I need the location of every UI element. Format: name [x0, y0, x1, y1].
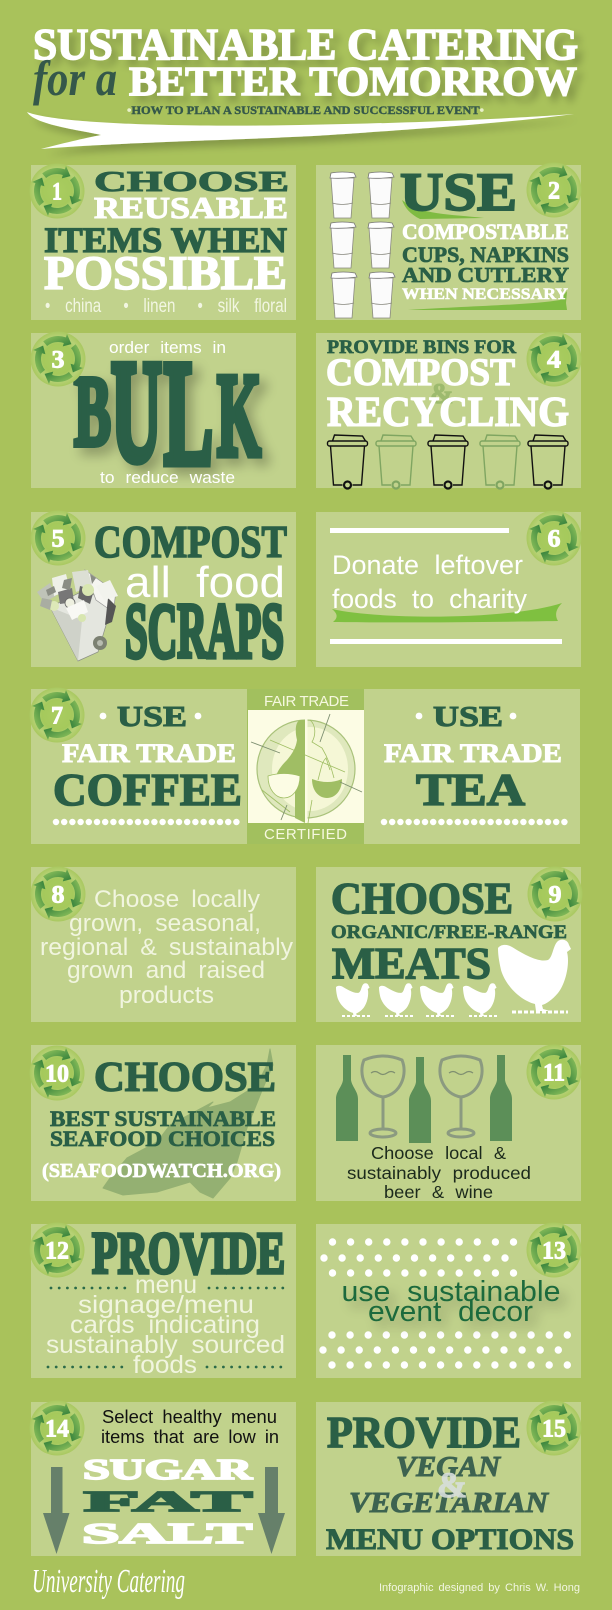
- left heading: use: USE: [117, 701, 187, 733]
- heading: use: USE: [400, 162, 517, 222]
- panel 3: bulk: [31, 331, 296, 496]
- badge 14: 14: [45, 1416, 69, 1442]
- title line 1: SUSTAINABLE CATERING: [33, 20, 578, 69]
- number badges: [30, 162, 582, 1456]
- panel 15: vegan vegetarian: [316, 1402, 581, 1556]
- title script: for a: for a: [33, 50, 117, 106]
- text block: Choose locally: [94, 886, 260, 913]
- badge 6: 6: [548, 526, 560, 552]
- footer: university catering: University Catering: [32, 1563, 185, 1600]
- heading: items when: ITEMS WHEN: [44, 220, 287, 260]
- heading: compost: COMPOST: [94, 516, 287, 567]
- text block: grown and raised: [67, 957, 265, 984]
- panel 11: beer and wine: [316, 1045, 581, 1202]
- text block: products: [119, 982, 214, 1009]
- text: use sustainable event decor: [342, 1276, 560, 1328]
- green swoosh: [408, 291, 567, 310]
- text: use sustainable event decor: event decor: [368, 1296, 533, 1328]
- bottom rule: [330, 639, 562, 644]
- left heading: coffee: COFFEE: [53, 764, 242, 815]
- text: and cutlery: AND CUTLERY: [402, 263, 569, 287]
- heading: BULK warped: [74, 331, 261, 496]
- text block: signage/menu: [78, 1291, 254, 1319]
- badge 7: [30, 688, 84, 742]
- heading: possible: POSSIBLE: [44, 247, 287, 300]
- text block: sustainably sourced: [46, 1331, 285, 1359]
- text: select healthy: items that are low in: [101, 1427, 279, 1447]
- text: cups napkins: CUPS, NAPKINS: [402, 242, 569, 267]
- right dotted rule: [384, 819, 565, 825]
- heading: menu options: MENU OPTIONS: [326, 1523, 574, 1556]
- list: • china • linen • silk floral: [45, 296, 287, 317]
- text block: Choose local &: [371, 1143, 506, 1163]
- panel 12: provide menu signage: [31, 1220, 296, 1379]
- icon: overflowing trash can: [37, 570, 118, 661]
- text block: sustainably produced: [347, 1163, 531, 1183]
- icons: bottles and glasses: [336, 1055, 512, 1143]
- left heading: fair trade: FAIR TRADE: [62, 739, 236, 768]
- heading: reusable: REUSABLE: [94, 190, 288, 225]
- panel 4: bins: [316, 333, 581, 488]
- right heading: tea: TEA: [416, 764, 525, 815]
- panel 9: meats: [316, 867, 581, 1022]
- badge 15: [526, 1400, 582, 1456]
- heading: BULK warped: L: [164, 331, 213, 496]
- icon: fish: [103, 1049, 273, 1198]
- badge 10: [30, 1046, 84, 1100]
- top rule: [330, 528, 509, 533]
- badge 9: [528, 866, 582, 922]
- panel 3: bulk: K: [217, 349, 261, 481]
- text: all food: all food: [125, 558, 285, 607]
- heading: BULK warped: U: [111, 332, 162, 492]
- text: use sustainable event decor: use sustainable: [342, 1276, 560, 1308]
- panel 14: healthy menu: [31, 1402, 296, 1556]
- title block: [27, 20, 578, 149]
- panel 6: donate: [316, 512, 581, 667]
- green swoosh: [402, 200, 484, 219]
- text block: grown, seasonal,: [69, 910, 261, 937]
- panel 1: choose reusable: [31, 165, 296, 320]
- text block: beer & wine: [384, 1182, 493, 1202]
- panel 2: compostable: [316, 162, 581, 320]
- footer: designer credit: Infographic designed by Chris W. Hong: [379, 1582, 580, 1594]
- badge 1: [30, 164, 84, 218]
- text block: [40, 886, 293, 1009]
- badge 14: [30, 1400, 84, 1456]
- badge 12: 12: [45, 1238, 69, 1264]
- heading: salt: SALT: [82, 1518, 252, 1550]
- heading: BULK warped: B: [74, 355, 111, 467]
- fair trade certified logo: [247, 689, 364, 844]
- arrow: right down: [258, 1467, 285, 1554]
- heading: provide: PROVIDE: [327, 1408, 521, 1457]
- badge 1: 1: [52, 178, 62, 206]
- text: seafood choices: SEAFOOD CHOICES: [50, 1126, 275, 1151]
- ampersand: &: [437, 1465, 467, 1505]
- badge 4: 4: [547, 346, 562, 374]
- badge 8: 8: [52, 882, 64, 908]
- text: donate leftover: Donate leftover: [332, 550, 523, 580]
- arrow: left down: [43, 1467, 70, 1554]
- text: foods to charity: foods to charity: [332, 584, 527, 614]
- text: best sustainable: BEST SUSTAINABLE: [50, 1106, 276, 1131]
- right heading: fair trade: FAIR TRADE: [384, 739, 562, 768]
- panel 5: compost scraps: [31, 512, 296, 674]
- badge 5: [30, 510, 86, 566]
- text: to reduce waste: to reduce waste: [100, 468, 235, 487]
- panel 8: local products: [31, 867, 296, 1022]
- heading: choose: CHOOSE: [94, 167, 289, 198]
- heading: fat: FAT: [84, 1486, 252, 1518]
- logo text: certified: CERTIFIED: [264, 826, 347, 843]
- text: vegetarian: VEGETARIAN: [349, 1488, 550, 1519]
- dotted rules: [48, 1288, 285, 1367]
- text block: cards indicating: [70, 1311, 260, 1339]
- heading: compost: COMPOST: [326, 351, 515, 394]
- text: organic free range: ORGANIC/FREE-RANGE: [331, 922, 567, 943]
- text: select healthy: Select healthy menu: [102, 1407, 277, 1427]
- badge 13: [526, 1222, 582, 1278]
- text block: regional & sustainably: [40, 934, 293, 961]
- text block: [46, 1271, 285, 1379]
- left: use dots: [100, 713, 201, 719]
- badge 9: 9: [548, 882, 562, 908]
- heading: choose: CHOOSE: [331, 874, 513, 923]
- text: compostable: COMPOSTABLE: [402, 219, 569, 244]
- subtitle: •HOW TO PLAN A SUSTAINABLE AND SUCCESSFUL EVENT •: [127, 103, 484, 117]
- text: order items in: order items in: [109, 338, 226, 357]
- logo text: fair trade: FAIR TRADE: [264, 693, 349, 710]
- badge 2: [526, 162, 582, 218]
- green swoosh: [332, 603, 562, 622]
- right: use dots: [416, 713, 516, 719]
- badge 7: 7: [51, 702, 63, 730]
- heading: meats: MEATS: [332, 939, 491, 988]
- panel 13: event decor: [316, 1224, 581, 1378]
- heading: provide: PROVIDE: [92, 1220, 285, 1286]
- text block: foods: [133, 1351, 197, 1379]
- badge 13: 13: [542, 1238, 566, 1264]
- title line 2: BETTER TOMORROW: [129, 58, 577, 104]
- badge 2: 2: [548, 178, 560, 204]
- badge 4: [526, 332, 582, 386]
- icons: six cups: [330, 172, 395, 318]
- badge 15: 15: [542, 1416, 566, 1442]
- panel 10: seafood: [31, 1045, 296, 1201]
- icons: four small hens: [336, 983, 497, 1016]
- text: seafoodwatch: (SEAFOODWATCH.ORG): [42, 1160, 281, 1182]
- heading: sugar: SUGAR: [83, 1455, 253, 1486]
- text block: [347, 1143, 531, 1202]
- text: when necessary: WHEN NECESSARY: [402, 286, 568, 303]
- text: vegan: VEGAN: [396, 1452, 502, 1483]
- left dotted rule: [56, 819, 238, 825]
- badge 3: [30, 332, 86, 386]
- panel 7: fair trade: [31, 689, 580, 844]
- heading: choose: CHOOSE: [94, 1055, 276, 1101]
- badge 5: 5: [52, 526, 64, 552]
- right heading: use: USE: [433, 701, 503, 733]
- badge 3: 3: [52, 346, 64, 374]
- ampersand: &: [430, 379, 453, 410]
- badge 8: [30, 866, 86, 922]
- white dots pattern: [323, 1242, 570, 1365]
- badge 11: 11: [543, 1060, 565, 1086]
- icon: large hen: [498, 940, 571, 1012]
- text block: menu: [135, 1271, 197, 1299]
- icons: five bins: [328, 435, 568, 488]
- badge 6: [526, 510, 582, 566]
- heading: scraps: SCRAPS: [125, 587, 284, 674]
- text: provide bins for: PROVIDE BINS FOR: [327, 337, 516, 358]
- text: select healthy: [101, 1407, 279, 1447]
- white swoosh: [27, 112, 574, 149]
- badge 11: [526, 1044, 582, 1100]
- heading: recycling: RECYCLING: [327, 390, 569, 436]
- badge 12: [30, 1222, 84, 1278]
- badge 10: 10: [45, 1060, 69, 1088]
